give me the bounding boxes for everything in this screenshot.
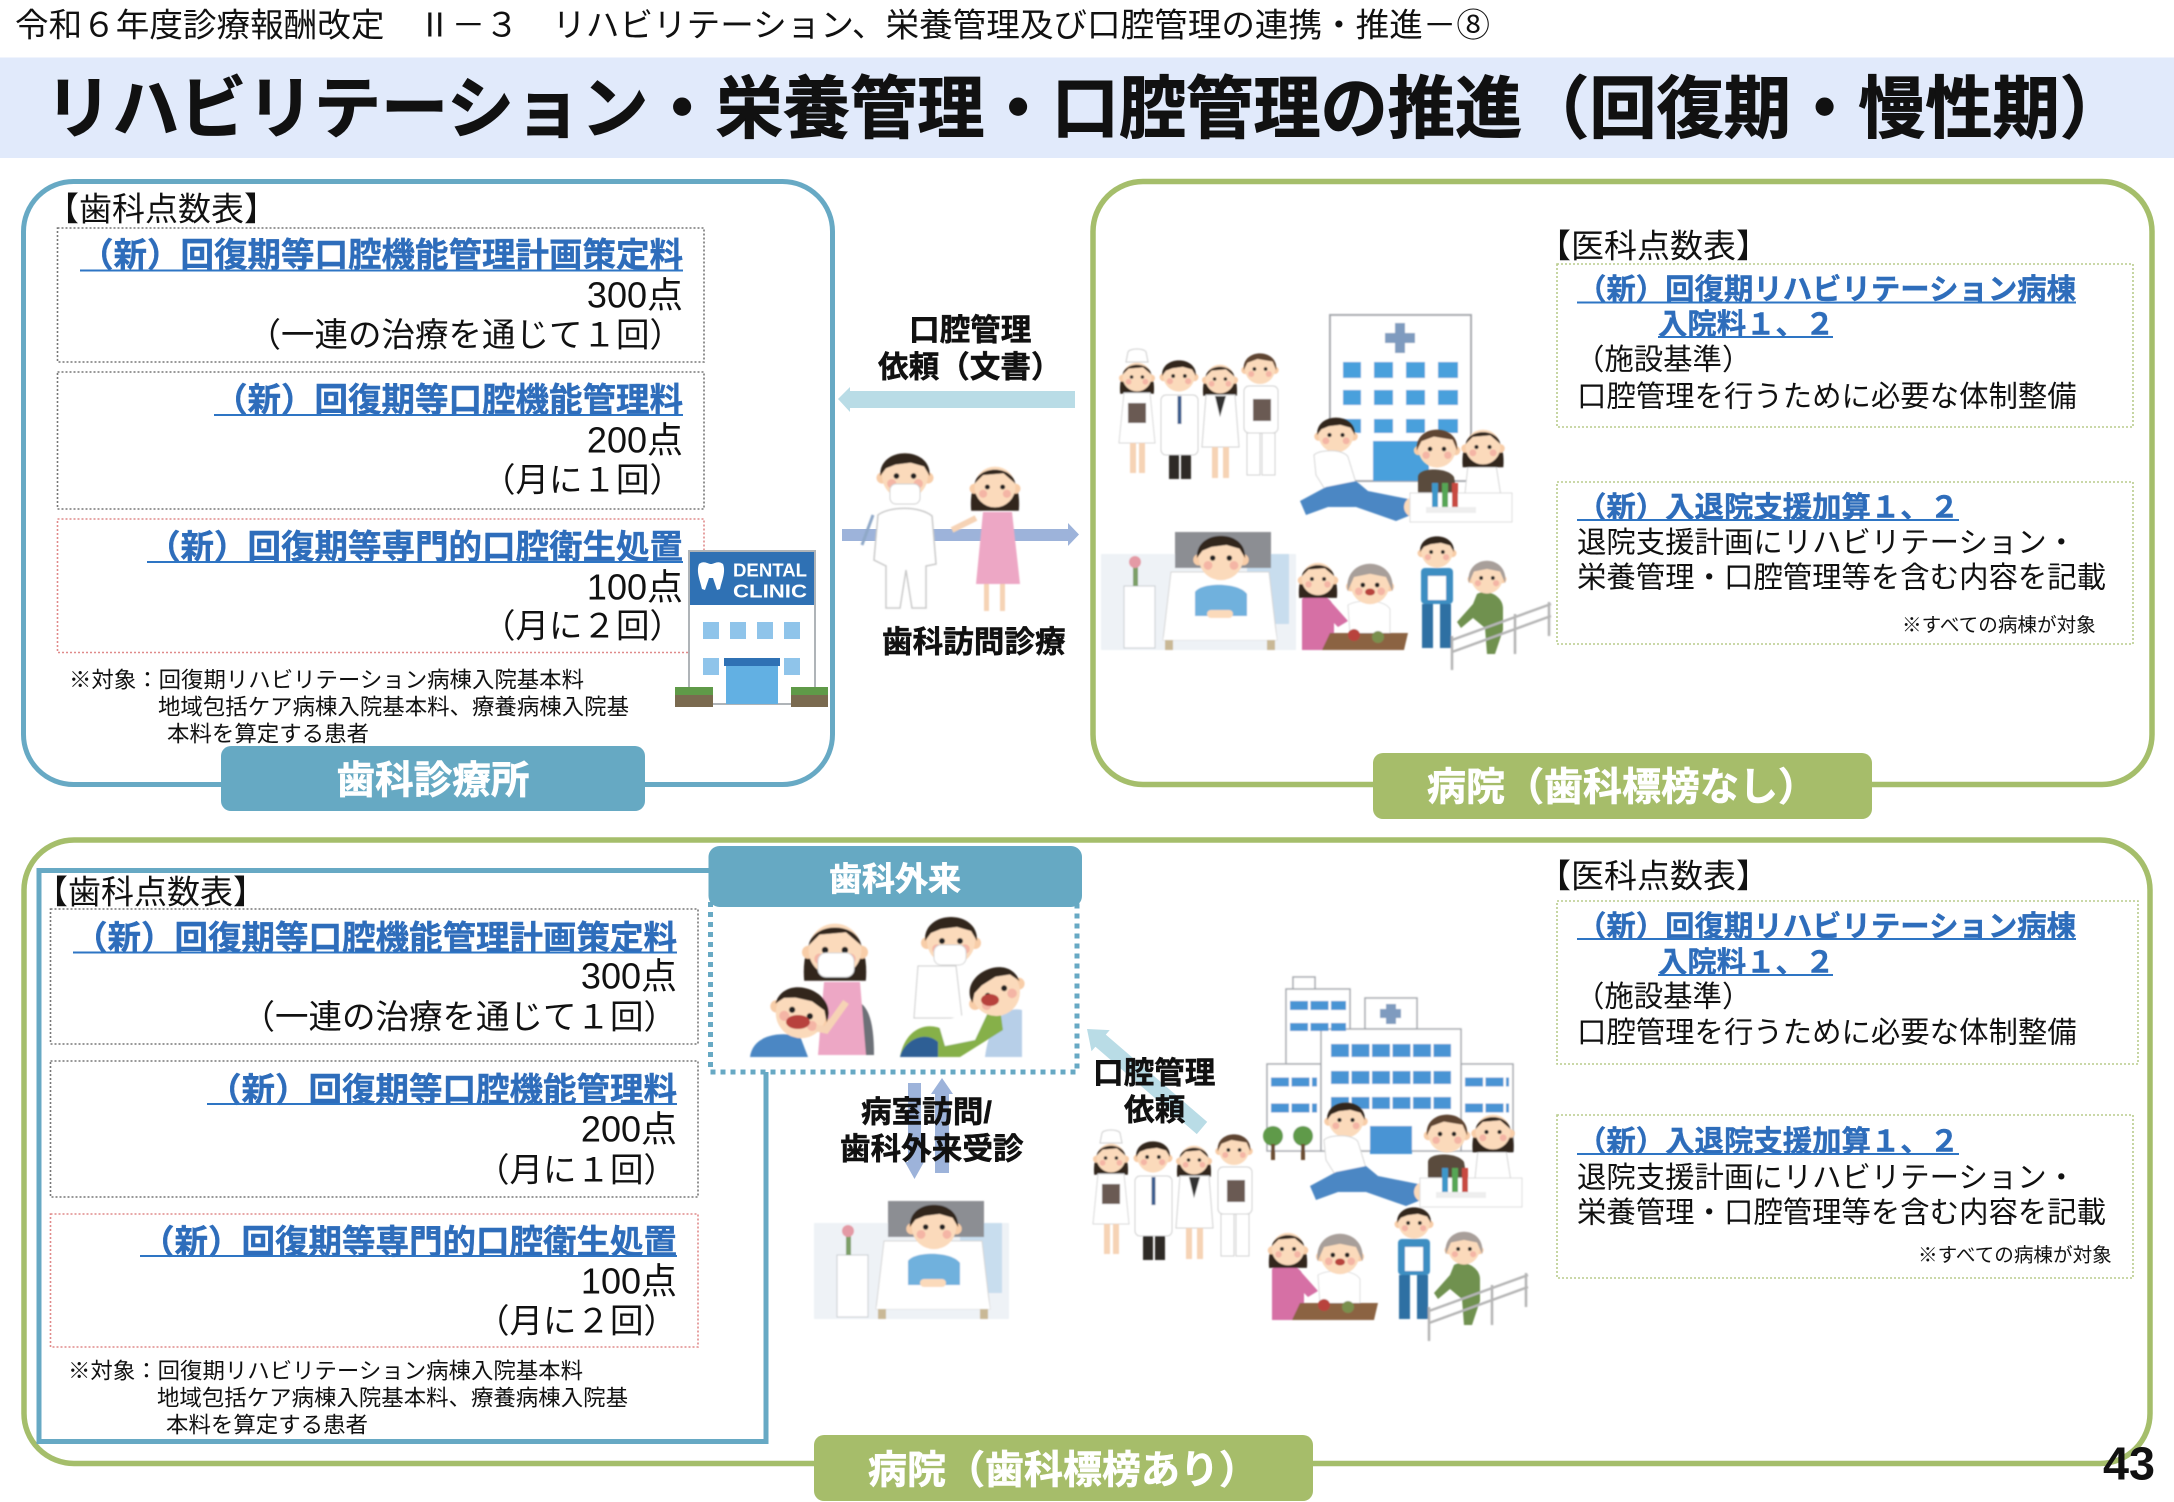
fee box: oral function plan	[50, 909, 698, 1044]
fee box: recovery rehabilitation ward: （新）回復期リハビリテーション病棟	[1577, 274, 2076, 306]
fee box: recovery rehabilitation ward: 口腔管理を行うために必要な体制整備	[1577, 380, 2077, 414]
fee box: recovery rehabilitation ward: 口腔管理を行うために必要な体制整備	[1577, 1016, 2077, 1050]
fee box: recovery rehabilitation ward	[1557, 264, 2133, 427]
fee box: professional oral hygiene: 100点	[581, 1260, 677, 1302]
header line: 令和６年度診療報酬改定 Ⅱ－３ リハビリテーション、栄養管理及び口腔管理の連携・推進－⑧	[15, 6, 1490, 44]
fee box: oral function management: （月に１回）	[476, 1152, 677, 1190]
fee box: admission and discharge support	[1557, 482, 2133, 644]
fee box: admission and discharge support: （新）入退院支援加算１、２	[1577, 1126, 1959, 1158]
label: oral management request: 依頼	[1124, 1094, 1186, 1128]
label: ward visit and outpatient consultation: 病室訪問/	[861, 1096, 992, 1130]
fee box: oral function plan: （一連の治療を通じて１回）	[248, 318, 683, 354]
badge: hospital with dentistry	[814, 1435, 1313, 1501]
panel: hospital without dentistry	[1093, 182, 2152, 819]
fee box: oral function management: （月に１回）	[482, 462, 683, 500]
label: oral management request: 口腔管理	[1093, 1056, 1215, 1090]
arrow: outpatient visit, upward	[931, 1078, 953, 1173]
fee box: recovery rehabilitation ward: 入院料１、２	[1658, 308, 1834, 342]
illustration: staff group	[1119, 349, 1279, 479]
icon: dental clinic building: CLINIC	[733, 582, 807, 602]
illustration: rehabilitation team	[1310, 1103, 1522, 1207]
fee box: recovery rehabilitation ward: 入院料１、２	[1658, 946, 1834, 980]
footnote: eligible patients	[68, 1358, 628, 1438]
fee box: oral function plan: （新）回復期等口腔機能管理計画策定料	[80, 238, 683, 274]
illustration: large hospital building	[1263, 977, 1513, 1160]
label: oral management request document	[878, 314, 1062, 384]
illustration: patient in bed	[814, 1201, 1009, 1319]
fee box: professional oral hygiene: （新）回復期等専門的口腔衛生処置	[141, 1224, 677, 1262]
footnote: eligible patients: 本料を算定する患者	[166, 1412, 368, 1438]
fee box: recovery rehabilitation ward	[1557, 901, 2138, 1064]
illustration: rehabilitation team	[1300, 418, 1512, 522]
fee box: admission and discharge support: 栄養管理・口腔管理等を含む内容を記載	[1577, 562, 2106, 594]
illustration: walking rehabilitation	[1418, 536, 1551, 670]
fee box: oral function plan	[58, 228, 704, 362]
fee box: oral function plan: 300点	[587, 274, 683, 316]
label: home dental visit: 歯科訪問診療	[882, 626, 1066, 660]
fee box: admission and discharge support: 退院支援計画にリハビリテーション・	[1577, 526, 2076, 560]
panel: hospital with dentistry	[24, 840, 2150, 1501]
main title: リハビリテーション・栄養管理・口腔管理の推進（回復期・慢性期）	[45, 72, 2127, 148]
badge: dental clinic: 歯科診療所	[337, 760, 529, 802]
fee box: oral function management: （新）回復期等口腔機能管理料	[208, 1072, 677, 1110]
icon: dental clinic building: DENTAL	[733, 560, 807, 580]
label: oral management request document: 口腔管理	[909, 314, 1031, 348]
footnote: eligible patients	[69, 668, 629, 746]
fee box: oral function management: 200点	[581, 1108, 677, 1150]
fee box: professional oral hygiene: （月に２回）	[482, 608, 683, 646]
label: oral management request	[1093, 1056, 1215, 1128]
illustration: hygienist treating child	[750, 924, 874, 1057]
fee box: oral function plan: （一連の治療を通じて１回）	[242, 1000, 677, 1036]
badge: dental clinic	[221, 746, 645, 811]
fee box: oral function management	[58, 372, 704, 509]
footnote: eligible patients: ※対象：回復期リハビリテーション病棟入院基本料	[68, 1358, 583, 1384]
fee box: professional oral hygiene: （月に２回）	[476, 1304, 677, 1340]
panel: dental clinic	[24, 182, 832, 811]
badge: hospital without dentistry	[1373, 753, 1872, 819]
fee box: oral function management: 200点	[587, 420, 683, 460]
icon: dental clinic building	[675, 551, 828, 707]
fee box: admission and discharge support: ※すべての病棟が対象	[1918, 1244, 2112, 1266]
panel: in-hospital dental section	[35, 870, 766, 1442]
footnote: eligible patients: 本料を算定する患者	[167, 722, 369, 746]
arrow: request to dental clinic	[838, 387, 1075, 412]
fee box: recovery rehabilitation ward: （施設基準）	[1575, 980, 1751, 1014]
fee box: oral function plan: 300点	[581, 956, 677, 996]
heading: medical point table: 【医科点数表】	[1538, 858, 1769, 894]
panel: dental outpatient	[708, 846, 1082, 1072]
fee box: admission and discharge support	[1557, 1115, 2133, 1278]
fee box: professional oral hygiene: 100点	[587, 566, 683, 608]
fee box: admission and discharge support: 栄養管理・口腔管理等を含む内容を記載	[1577, 1196, 2106, 1230]
illustration: dentist treating patient	[900, 917, 1033, 1057]
arrow: home visit to hospital	[842, 523, 1079, 546]
fee box: professional oral hygiene	[50, 1214, 698, 1347]
illustration: hospital building	[1330, 315, 1471, 481]
illustration: meal assistance	[1298, 563, 1408, 650]
fee box: admission and discharge support: ※すべての病棟が対象	[1902, 614, 2096, 636]
fee box: oral function management	[50, 1061, 698, 1197]
fee box: recovery rehabilitation ward: （新）回復期リハビリテーション病棟	[1577, 910, 2076, 944]
label: ward visit and outpatient consultation: 歯科外来受診	[840, 1132, 1024, 1166]
fee box: professional oral hygiene	[58, 519, 704, 652]
illustration: walking rehabilitation	[1394, 1207, 1528, 1341]
fee box: recovery rehabilitation ward: （施設基準）	[1575, 344, 1751, 376]
heading: medical point table: 【医科点数表】	[1538, 228, 1769, 264]
icon: dentist and hygienist	[862, 453, 1020, 611]
fee box: oral function plan: （新）回復期等口腔機能管理計画策定料	[74, 920, 677, 958]
label: ward visit and outpatient consultation	[840, 1096, 1024, 1166]
page number: 43	[2103, 1438, 2155, 1490]
fee box: professional oral hygiene: （新）回復期等専門的口腔衛生処置	[147, 530, 683, 566]
fee box: admission and discharge support: 退院支援計画にリハビリテーション・	[1577, 1162, 2076, 1194]
footnote: eligible patients: 地域包括ケア病棟入院基本料、療養病棟入院基	[158, 694, 629, 720]
badge: hospital without dentistry: 病院（歯科標榜なし）	[1427, 766, 1817, 810]
illustration: meal assistance	[1268, 1233, 1378, 1320]
heading: dental point table: 【歯科点数表】	[46, 190, 277, 228]
heading: dental point table: 【歯科点数表】	[35, 874, 266, 910]
title band	[0, 58, 2174, 158]
arrow: request to dental outpatient	[1087, 1029, 1207, 1134]
arrow: ward visit, downward	[905, 1083, 924, 1179]
footnote: eligible patients: ※対象：回復期リハビリテーション病棟入院基本料	[69, 668, 584, 692]
badge: dental outpatient	[708, 846, 1082, 907]
illustration: staff group	[1093, 1130, 1253, 1260]
fee box: oral function management: （新）回復期等口腔機能管理料	[214, 382, 683, 420]
badge: hospital with dentistry: 病院（歯科標榜あり）	[868, 1450, 1258, 1492]
footnote: eligible patients: 地域包括ケア病棟入院基本料、療養病棟入院基	[157, 1386, 628, 1410]
badge: dental outpatient: 歯科外来	[829, 860, 961, 898]
illustration: patient in bed	[1101, 532, 1296, 650]
label: oral management request document: 依頼（文書）	[878, 350, 1062, 384]
fee box: admission and discharge support: （新）入退院支援加算１、２	[1577, 492, 1959, 524]
